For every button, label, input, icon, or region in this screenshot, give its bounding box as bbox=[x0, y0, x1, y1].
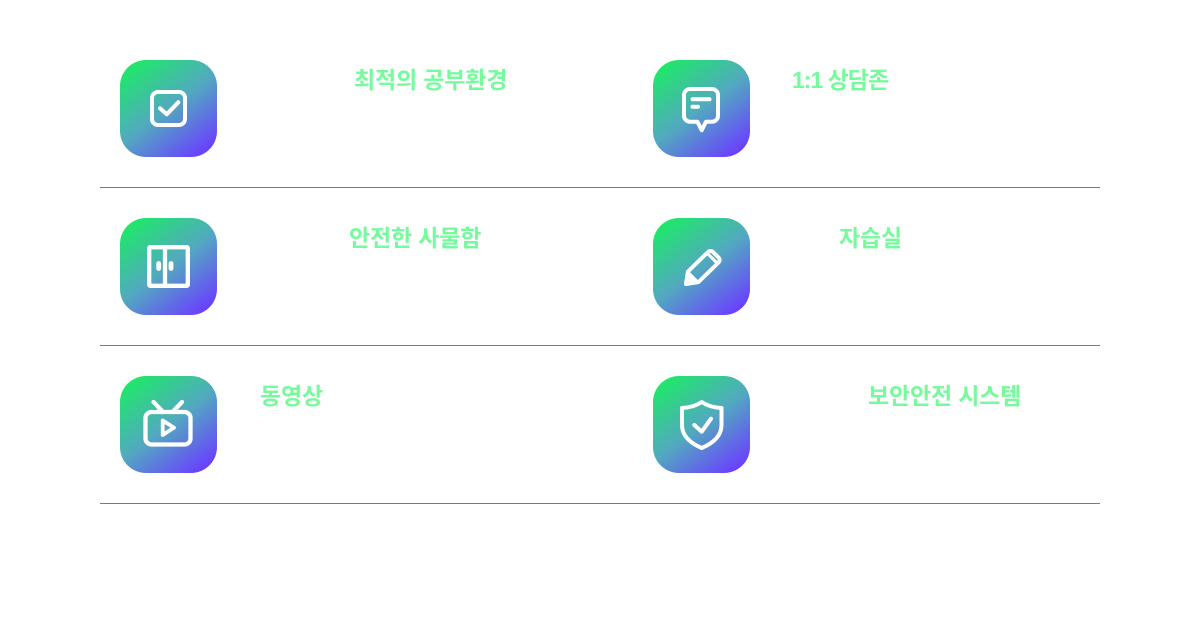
icon: pencil bbox=[653, 218, 750, 315]
icon: locker bbox=[120, 218, 217, 315]
divider 2 bbox=[100, 345, 1100, 346]
icon: speech bubble bbox=[653, 60, 750, 157]
icon: shield check bbox=[653, 376, 750, 473]
heading: security system: 보안안전 시스템 bbox=[868, 383, 1021, 409]
divider 3 bbox=[100, 503, 1100, 504]
heading: safe locker: 안전한 사물함 bbox=[349, 225, 481, 251]
divider 1 bbox=[100, 187, 1100, 188]
heading: video: 동영상 bbox=[260, 383, 323, 409]
heading: counseling zone: 1:1 상담존 bbox=[792, 67, 888, 93]
heading: study environment: 최적의 공부환경 bbox=[354, 67, 507, 93]
icon: checkbox bbox=[120, 60, 217, 157]
icon: tv play bbox=[120, 376, 217, 473]
heading: study room: 자습실 bbox=[839, 225, 902, 251]
